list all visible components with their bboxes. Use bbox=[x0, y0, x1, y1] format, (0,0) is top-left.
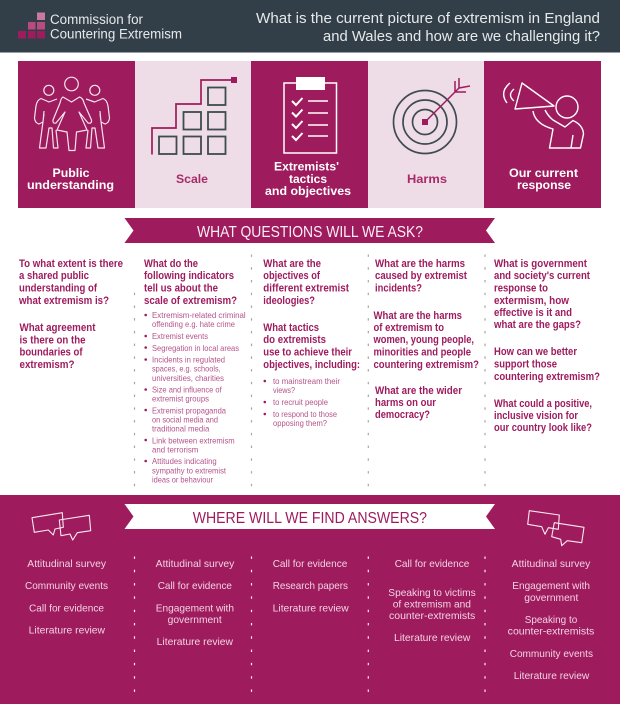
label: Extremists' bbox=[274, 160, 339, 174]
objectives bullet list: to respond to those bbox=[273, 409, 337, 419]
sources column 1 bbox=[25, 559, 108, 636]
questions column 3: tactics and objectives: use to achieve their bbox=[263, 346, 352, 358]
icon: person with megaphone bbox=[504, 83, 584, 148]
questions column 4: harms: caused by extremist bbox=[375, 270, 467, 282]
logo text: Countering Extremism bbox=[50, 26, 182, 42]
questions column 4: harms: minorities and people bbox=[374, 346, 471, 358]
questions column 5: current response: countering extremism? bbox=[494, 371, 600, 383]
sources column 2: Call for evidence bbox=[158, 581, 232, 592]
questions column 2: scale: following indicators bbox=[144, 270, 234, 282]
label: response bbox=[517, 178, 571, 192]
questions column 2: scale: tell us about the bbox=[144, 282, 218, 294]
questions column 4: harms: What are the wider bbox=[375, 385, 462, 397]
label bbox=[265, 160, 351, 198]
questions column 3: tactics and objectives: What are the bbox=[263, 258, 321, 270]
panel: where will we find answers bbox=[0, 495, 620, 704]
indicator bullet list: traditional media bbox=[152, 424, 209, 434]
logo icon bbox=[18, 12, 45, 38]
sources column 4: Speaking to victims bbox=[388, 588, 476, 599]
questions column 5: current response: and society's current bbox=[494, 270, 590, 282]
indicator bullet list: offending e.g. hate crime bbox=[152, 319, 235, 329]
indicator bullet list: universities, charities bbox=[152, 373, 224, 383]
questions column 1: public understanding: What agreement bbox=[20, 322, 96, 334]
questions column 4: harms: countering extremism? bbox=[374, 359, 479, 371]
questions column 2: scale: scale of extremism? bbox=[144, 295, 237, 307]
icon: group of people bbox=[34, 77, 110, 150]
indicator bullet list bbox=[144, 310, 246, 484]
sources column 2: government bbox=[168, 615, 222, 626]
panel: tactics and objectives bbox=[251, 61, 368, 208]
questions column 4: harms bbox=[373, 258, 479, 421]
sources column 3: Research papers bbox=[273, 581, 348, 592]
objectives bullet list: to recruit people bbox=[273, 397, 328, 407]
objectives bullet list: views? bbox=[273, 385, 295, 395]
sources column 5: counter-extremists bbox=[508, 626, 594, 638]
label: Scale bbox=[176, 172, 208, 186]
sources column 2: Literature review bbox=[157, 637, 234, 648]
label: and objectives bbox=[265, 184, 351, 198]
sources column 5: Literature review bbox=[514, 671, 590, 682]
sources column 1: Literature review bbox=[29, 626, 106, 636]
questions column 4: harms: of extremism to bbox=[374, 322, 444, 334]
label bbox=[27, 166, 114, 192]
indicator bullet list: extremist groups bbox=[152, 394, 209, 404]
panel: our current response bbox=[484, 61, 601, 208]
indicator bullet list: ideas or behaviour bbox=[152, 474, 213, 484]
sources column 5: Engagement with bbox=[512, 581, 590, 592]
indicator bullet list: Segregation in local areas bbox=[152, 343, 239, 353]
questions column 1: public understanding: what extremism is? bbox=[18, 295, 109, 307]
title: What is the current picture of extremism in England bbox=[256, 10, 600, 27]
label: Our current bbox=[509, 166, 578, 180]
questions column 5: current response bbox=[493, 258, 600, 434]
indicator bullet list: Extremist propaganda bbox=[152, 406, 226, 416]
indicator bullet list: Link between extremism bbox=[152, 435, 235, 445]
indicator bullet list: Size and influence of bbox=[152, 384, 222, 394]
title: and Wales and how are we challenging it? bbox=[323, 28, 600, 45]
indicator bullet list: Extremist events bbox=[152, 331, 208, 341]
questions column 2: scale bbox=[144, 258, 246, 484]
icon: stepped squares bbox=[152, 77, 237, 154]
panel: public understanding bbox=[18, 61, 135, 208]
label: Public bbox=[52, 166, 90, 180]
sources column 2: Attitudinal survey bbox=[156, 559, 235, 570]
questions column 5: current response: what are the gaps? bbox=[493, 319, 581, 331]
indicator bullet list: Incidents in regulated bbox=[152, 354, 225, 364]
sources column 5: Attitudinal survey bbox=[512, 559, 591, 570]
panel: scale bbox=[135, 61, 251, 208]
questions column 1: public understanding: understanding of bbox=[19, 282, 97, 294]
banner: what questions will we ask bbox=[124, 218, 495, 243]
questions column 1: public understanding: To what extent is there bbox=[19, 258, 123, 270]
sources column 5 bbox=[508, 559, 594, 682]
questions column 4: harms: incidents? bbox=[375, 282, 422, 294]
questions column 1: public understanding: extremism? bbox=[20, 359, 74, 371]
sources column 3 bbox=[273, 559, 349, 614]
questions column 3: tactics and objectives: objectives, including: bbox=[263, 359, 360, 371]
questions column 3: tactics and objectives: objectives of bbox=[263, 270, 320, 282]
indicator bullet list: spaces, e.g. schools, bbox=[152, 364, 221, 374]
questions column 5: current response: support those bbox=[494, 358, 557, 370]
logo text bbox=[50, 12, 182, 42]
questions column 4: harms: democracy? bbox=[375, 409, 430, 421]
sources column 4 bbox=[388, 559, 476, 644]
indicator bullet list: Attitudes indicating bbox=[152, 456, 217, 466]
questions column 1: public understanding: is there on the bbox=[20, 334, 86, 346]
questions column 2: scale: What do the bbox=[144, 258, 198, 270]
sources column 1: Community events bbox=[25, 581, 108, 592]
icon: speech bubbles right bbox=[528, 511, 584, 546]
questions column 1: public understanding: boundaries of bbox=[20, 346, 83, 358]
sources column 5: Community events bbox=[510, 649, 593, 660]
icon: speech bubbles left bbox=[32, 513, 91, 540]
questions column 4: harms: What are the harms bbox=[374, 310, 462, 322]
questions column 5: current response: inclusive vision for bbox=[494, 410, 578, 422]
questions column 5: current response: our country look like? bbox=[494, 422, 592, 434]
sources column 2: Engagement with bbox=[156, 604, 234, 614]
indicator bullet list: Extremism-related criminal bbox=[152, 310, 246, 320]
header bar bbox=[0, 0, 620, 52]
label: Harms bbox=[407, 172, 447, 186]
icon: target with arrow bbox=[394, 78, 470, 154]
questions column 3: tactics and objectives: ideologies? bbox=[263, 295, 315, 307]
sources column 3: Literature review bbox=[273, 604, 349, 614]
questions column 5: current response: response to bbox=[494, 282, 548, 294]
objectives bullet list: opposing them? bbox=[273, 418, 327, 428]
questions column 3: tactics and objectives bbox=[263, 258, 360, 428]
objectives bullet list: to mainstream their bbox=[273, 376, 340, 386]
indicator bullet list: sympathy to extremist bbox=[152, 466, 227, 476]
objectives bullet list bbox=[264, 376, 340, 428]
title bbox=[256, 10, 600, 45]
questions column 3: tactics and objectives: do extremists bbox=[263, 334, 326, 346]
sources column 2 bbox=[156, 559, 235, 648]
label bbox=[509, 166, 578, 192]
sources column 1: Attitudinal survey bbox=[27, 559, 107, 570]
banner: where will we find answers: WHERE WILL WE FIND ANSWERS? bbox=[193, 510, 427, 527]
questions column 5: current response: What could a positive, bbox=[494, 398, 592, 410]
questions column 5: current response: What is government bbox=[494, 258, 587, 270]
questions column 3: tactics and objectives: What tactics bbox=[263, 322, 319, 334]
questions column 1: public understanding: a shared public bbox=[19, 270, 89, 282]
label: understanding bbox=[27, 178, 114, 192]
banner: what questions will we ask: WHAT QUESTIONS WILL WE ASK? bbox=[197, 224, 423, 241]
questions column 4: harms: What are the harms bbox=[375, 258, 465, 270]
icon: clipboard bbox=[284, 77, 336, 153]
label: tactics bbox=[289, 172, 327, 186]
panel: harms bbox=[368, 61, 484, 208]
sources column 1: Call for evidence bbox=[29, 604, 104, 614]
sources column 4: counter-extremists bbox=[389, 611, 475, 622]
logo text: Commission for bbox=[50, 12, 143, 27]
sources column 4: Call for evidence bbox=[395, 559, 470, 570]
banner: where will we find answers bbox=[124, 504, 495, 529]
sources column 5: Speaking to bbox=[525, 615, 578, 626]
sources column 3: Call for evidence bbox=[273, 559, 348, 570]
indicator bullet list: on social media and bbox=[152, 414, 218, 424]
questions column 5: current response: How can we better bbox=[494, 346, 577, 358]
questions column 5: current response: extermism, how bbox=[494, 295, 570, 307]
indicator bullet list: and terrorism bbox=[152, 444, 198, 454]
questions column 1: public understanding bbox=[18, 258, 123, 371]
questions column 4: harms: harms on our bbox=[375, 397, 436, 409]
sources column 4: Literature review bbox=[394, 633, 471, 644]
questions column 3: tactics and objectives: different extremist bbox=[263, 282, 349, 294]
sources column 4: of extremism and bbox=[393, 600, 471, 610]
sources column 5: government bbox=[524, 593, 578, 604]
questions column 5: current response: effective is it and bbox=[494, 307, 572, 319]
questions column 4: harms: women, young people, bbox=[373, 334, 474, 346]
